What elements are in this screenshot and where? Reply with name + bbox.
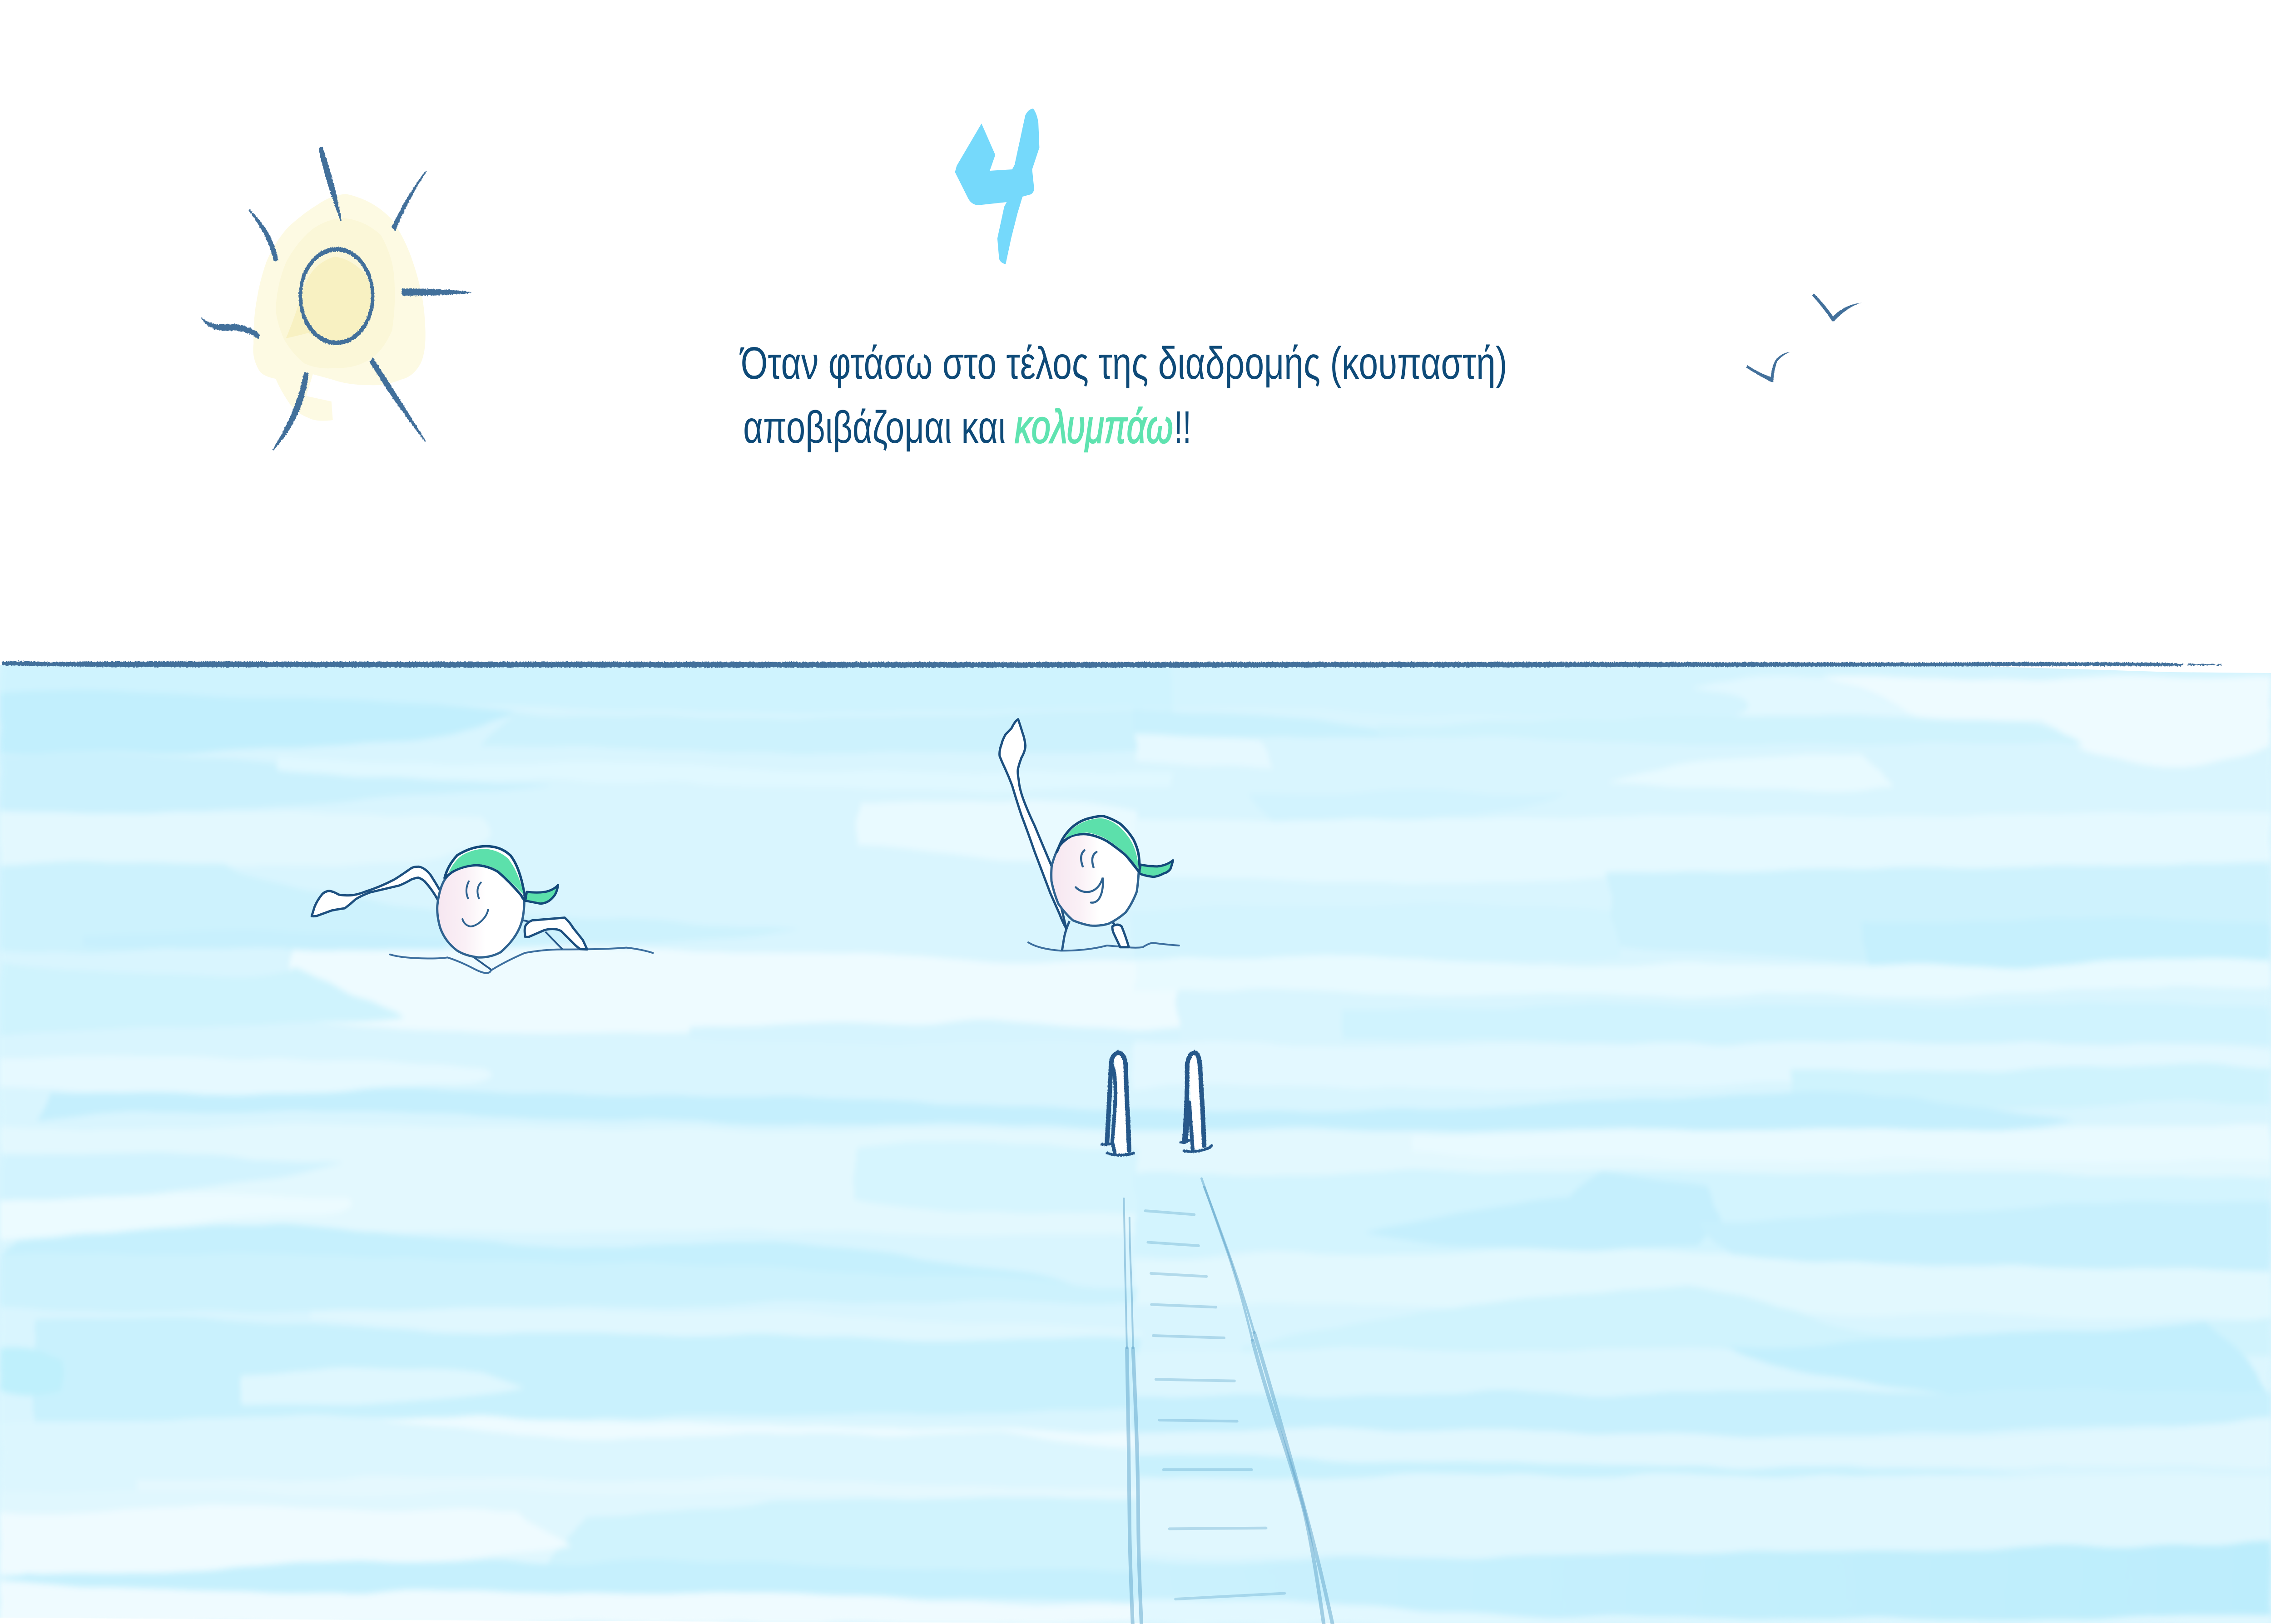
- face: [1076, 850, 1103, 903]
- text: caption: [739, 338, 1507, 453]
- sun glow: [253, 194, 426, 421]
- right post: [1180, 1053, 1212, 1152]
- face: [462, 881, 488, 926]
- icon: sun: [202, 148, 471, 450]
- text: caption: αποβιβάζομαι και: [743, 402, 1006, 452]
- horizon line: [2, 661, 2221, 668]
- text: caption: κολυμπάω: [1015, 400, 1173, 453]
- ladder: [1102, 1053, 1333, 1624]
- cap: [445, 846, 526, 901]
- raised arm: [1000, 719, 1066, 928]
- swimmer: front crawl: [312, 846, 653, 973]
- tail of cap: [1139, 860, 1173, 877]
- lower arm: [1112, 921, 1129, 947]
- text: caption: !!: [1174, 402, 1191, 452]
- leg under head: [474, 957, 491, 970]
- back arm: [521, 918, 587, 950]
- front arm: [312, 866, 440, 916]
- tail of cap: [526, 885, 558, 904]
- sun ring and rays: [202, 148, 471, 450]
- numeral 4: [955, 109, 1039, 264]
- head: [437, 865, 524, 957]
- head: [1051, 834, 1139, 926]
- swimmer: waving: [1000, 719, 1179, 951]
- wave line: [390, 948, 653, 973]
- cap: [1057, 816, 1140, 872]
- icon: birds: [1746, 294, 1862, 382]
- submerged rails: [1124, 1178, 1333, 1624]
- text: caption: Όταν φτάσω στο τέλος της διαδρομής (κουπαστή): [739, 338, 1507, 388]
- torso line: [1062, 921, 1070, 951]
- submerged steps: [1145, 1211, 1284, 1599]
- wave line: [1028, 942, 1179, 951]
- left post: [1102, 1053, 1134, 1155]
- sea: watercolour water area: [0, 654, 2271, 1624]
